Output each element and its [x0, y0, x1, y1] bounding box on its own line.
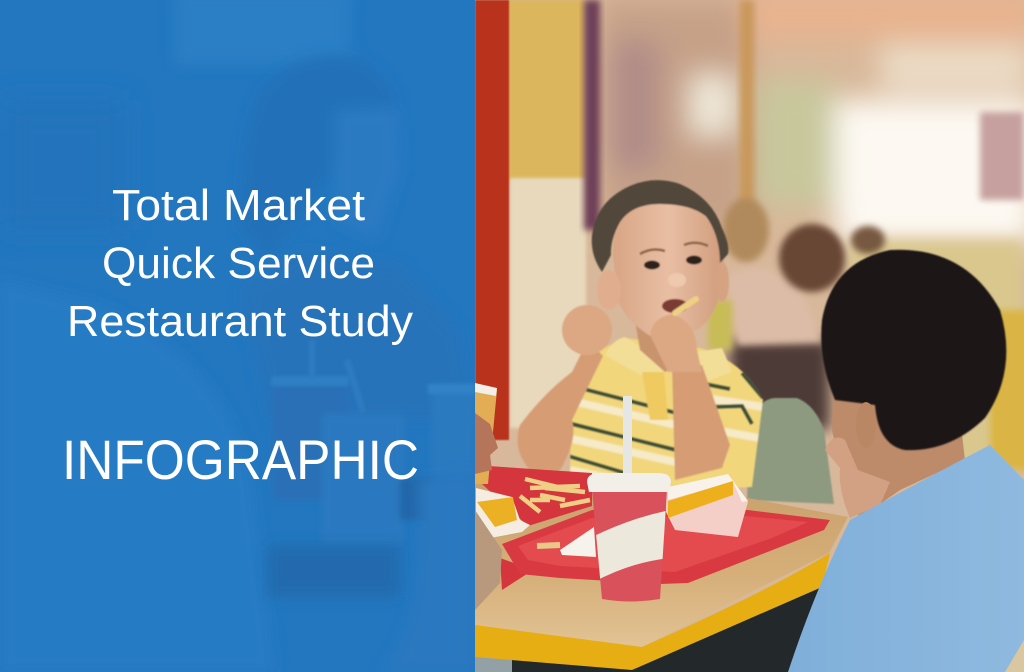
yellow and white food box: [666, 474, 748, 537]
left edge objects: [475, 383, 502, 610]
title: [67, 181, 413, 346]
blue overlay panel with faded photo: [66, 0, 475, 668]
subtitle: INFOGRAPHIC: [62, 428, 419, 491]
front red tray: [502, 510, 830, 584]
title: Quick Service: [102, 239, 375, 288]
french fry: [675, 299, 696, 313]
boy's arms: [518, 340, 603, 473]
foreground boy's hair: [821, 250, 1006, 450]
photo: children eating at a restaurant table: [475, 0, 1024, 672]
foreground boy's ear: [862, 402, 871, 406]
boy's neck and head: [636, 326, 668, 372]
table: [475, 480, 848, 672]
boy: [518, 180, 770, 490]
boy's hair: [592, 180, 728, 272]
title: Total Market: [112, 181, 365, 230]
foreground boy's shirt: [788, 445, 1024, 672]
boy's shirt: [568, 337, 770, 490]
chair: [747, 398, 834, 504]
drinking straw: [623, 396, 632, 476]
foreground boy: [788, 250, 1024, 672]
soft drink cup: [587, 473, 671, 602]
foreground boy's hand: [825, 438, 890, 518]
dark area under table: [512, 588, 819, 672]
faded woman and table silhouettes: [180, 0, 475, 668]
blurred children in background: [708, 198, 885, 430]
blurred restaurant background: [475, 0, 1024, 672]
boy's eyes, nose and mouth: [640, 243, 708, 313]
title: Restaurant Study: [67, 297, 413, 346]
foreground boy's face and neck: [832, 395, 965, 518]
rear tray with fries: [476, 466, 592, 590]
